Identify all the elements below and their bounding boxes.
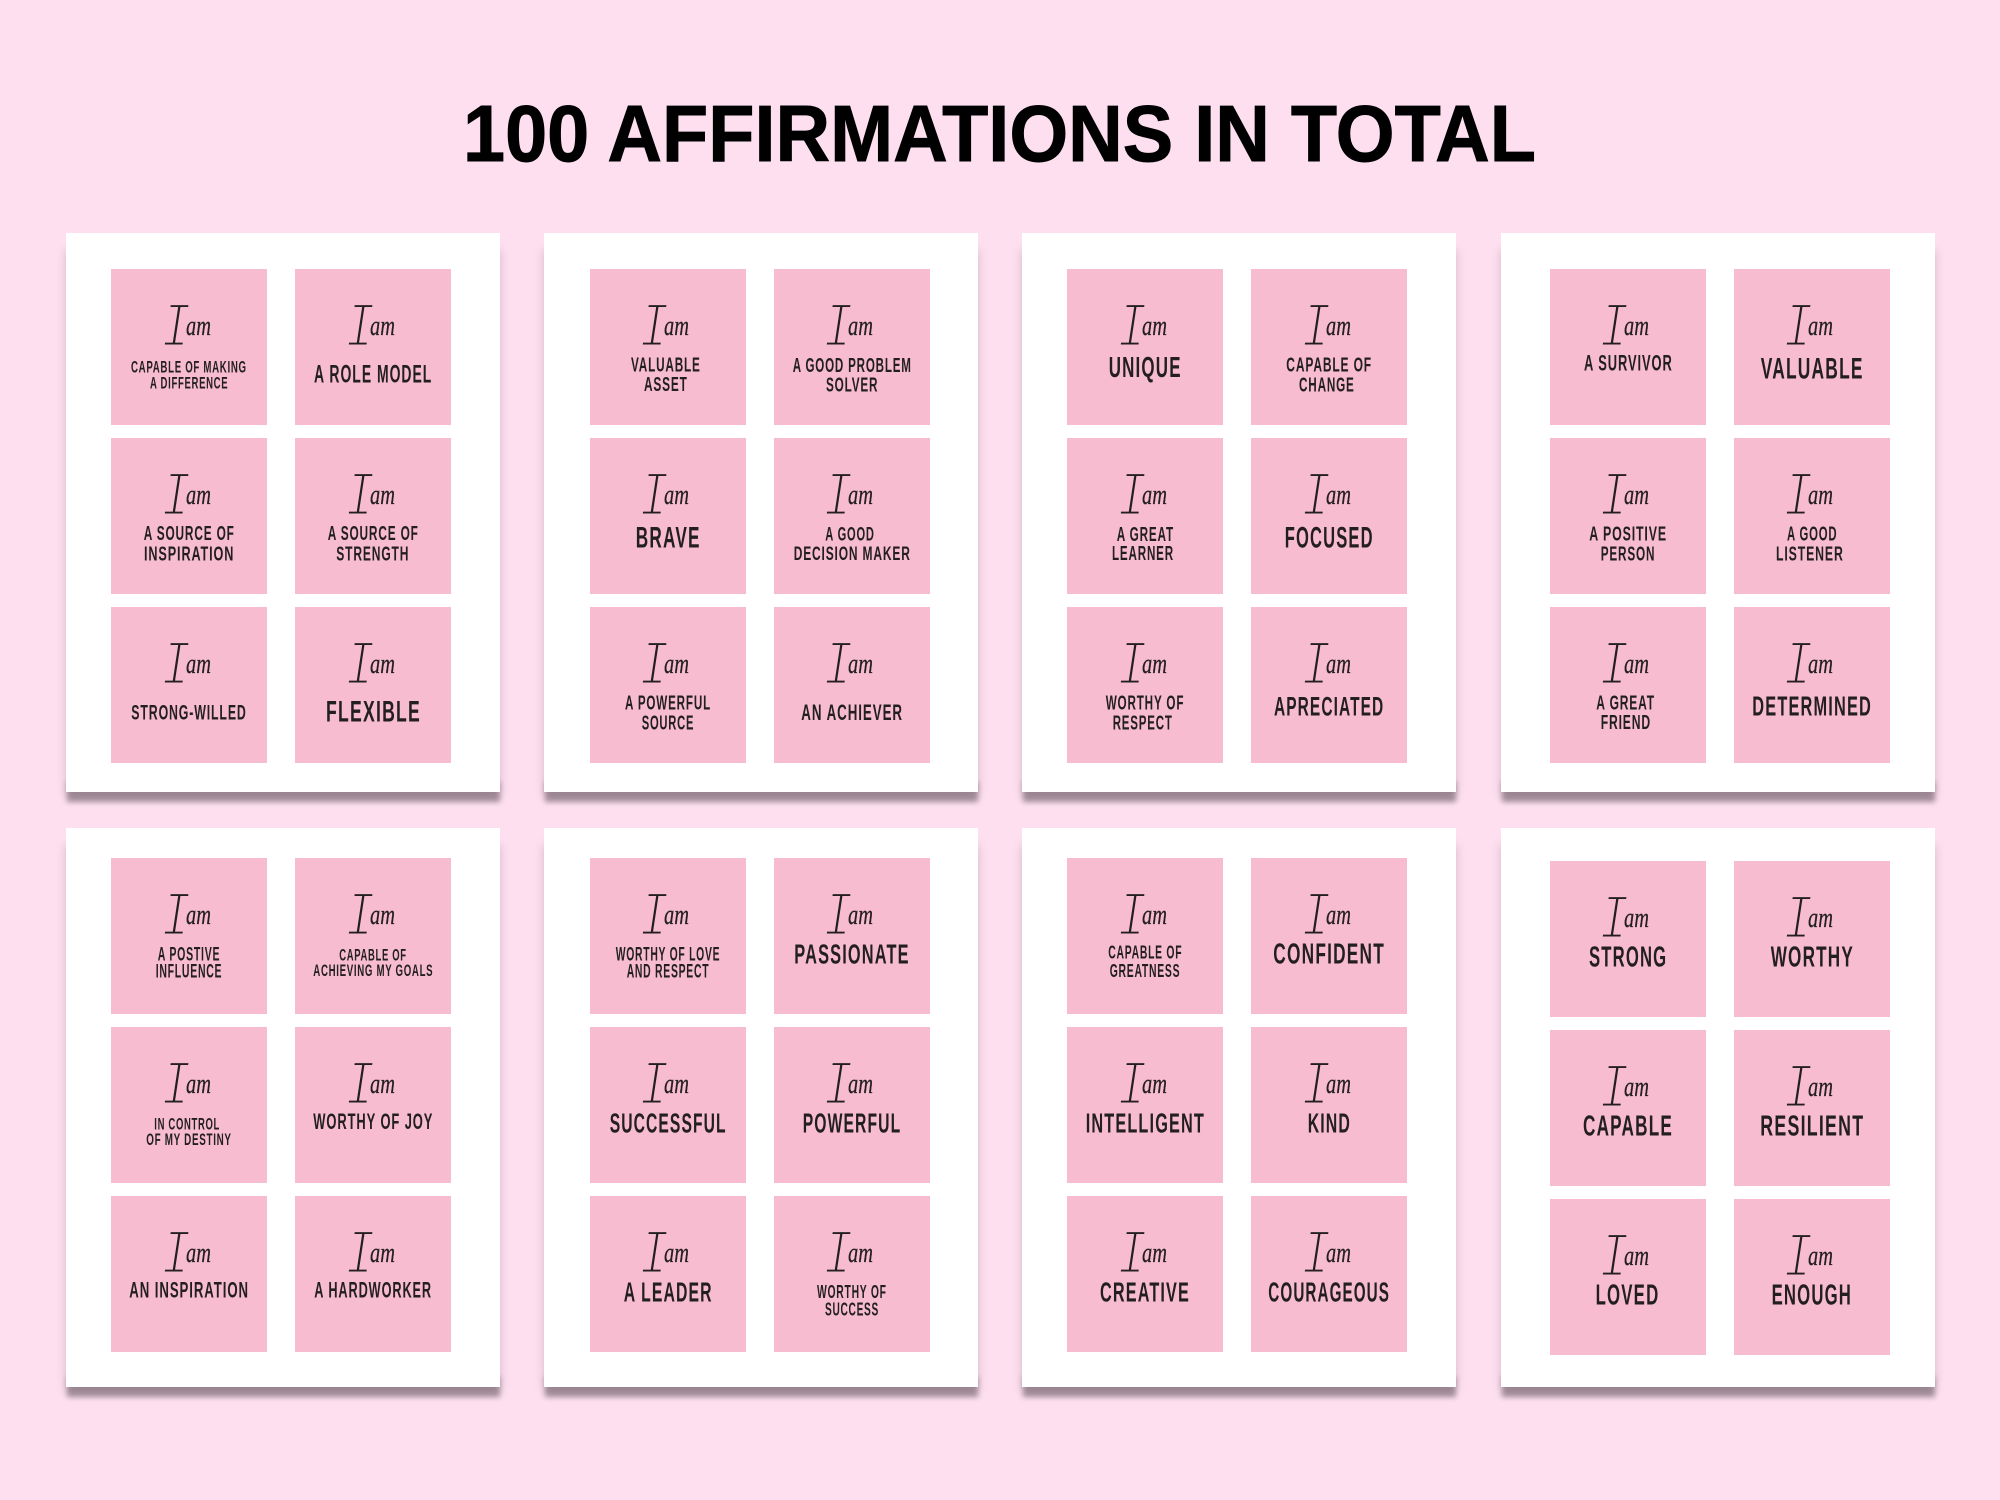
- card: an inspiration: I: [161, 1221, 191, 1293]
- card: strong-willed: [111, 607, 267, 763]
- card: a good problem solver: [774, 269, 930, 425]
- card: a survivor: A SURVIVOR: [1584, 351, 1673, 376]
- card: a great friend: I: [1599, 632, 1629, 704]
- card: powerful: I: [823, 1052, 853, 1124]
- card: a survivor: [1550, 269, 1706, 425]
- card: loved: LOVED: [1596, 1280, 1659, 1312]
- panel: sheet 5: [66, 828, 500, 1397]
- card: capable: I: [1599, 1055, 1629, 1127]
- card: a role model: I: [345, 294, 375, 366]
- card: focused: FOCUSED: [1285, 521, 1374, 554]
- panel: sheet 8: [1501, 828, 1935, 1397]
- card: capable of making a difference: am: [186, 311, 211, 342]
- card: capable of achieving my goals: [295, 858, 451, 1014]
- card: flexible: [295, 607, 451, 763]
- card: enough: ENOUGH: [1772, 1280, 1852, 1312]
- panel: sheet 1: [66, 233, 500, 802]
- card: a source of strength: A SOURCE OF: [328, 522, 419, 545]
- card: resilient: I: [1783, 1055, 1813, 1127]
- card: a powerful source: SOURCE: [642, 712, 694, 734]
- card: a source of inspiration: A SOURCE OF: [144, 522, 235, 545]
- card: a positive person: A POSITIVE: [1589, 522, 1667, 545]
- card: worthy of joy: am: [370, 1069, 395, 1100]
- panel: sheet 4: [1501, 233, 1935, 802]
- card: a great learner: [1067, 438, 1223, 594]
- card: courageous: am: [1326, 1238, 1351, 1269]
- card: capable of achieving my goals: ACHIEVING MY GOALS: [313, 961, 433, 980]
- card: resilient: [1734, 1030, 1890, 1186]
- card: capable of greatness: [1067, 858, 1223, 1014]
- card: determined: I: [1783, 632, 1813, 704]
- card: unique: UNIQUE: [1109, 352, 1182, 384]
- card: a good listener: am: [1808, 480, 1833, 511]
- card: courageous: COURAGEOUS: [1268, 1276, 1390, 1307]
- card: a postive influence: INFLUENCE: [156, 962, 222, 983]
- card: a hardworker: am: [370, 1238, 395, 1269]
- card: valuable asset: I: [639, 294, 669, 366]
- card: worthy of joy: I: [345, 1052, 375, 1124]
- card: a survivor: I: [1599, 294, 1629, 366]
- card: unique: I: [1117, 294, 1147, 366]
- card: valuable asset: ASSET: [644, 374, 688, 396]
- card: a good problem solver: am: [848, 311, 873, 342]
- card: passionate: [774, 858, 930, 1014]
- card: successful: [590, 1027, 746, 1183]
- card: loved: [1550, 1199, 1706, 1355]
- card: a powerful source: [590, 607, 746, 763]
- card: a positive person: PERSON: [1601, 542, 1655, 565]
- panel: sheet 2: [544, 233, 978, 802]
- panel: sheet 7: [1022, 828, 1456, 1397]
- card: valuable asset: [590, 269, 746, 425]
- card: a great friend: am: [1624, 649, 1649, 680]
- card: brave: am: [664, 480, 689, 511]
- card: valuable asset: VALUABLE: [631, 355, 701, 377]
- card: apreciated: APRECIATED: [1274, 692, 1384, 722]
- card: capable of change: am: [1326, 311, 1351, 342]
- card: passionate: I: [823, 883, 853, 955]
- card: unique: am: [1142, 311, 1167, 342]
- card: worthy of love and respect: [590, 858, 746, 1014]
- card: strong: I: [1599, 886, 1629, 958]
- card: a source of strength: [295, 438, 451, 594]
- card: a hardworker: A HARDWORKER: [314, 1278, 432, 1303]
- card: valuable: am: [1808, 311, 1833, 342]
- card: a good problem solver: SOLVER: [826, 374, 878, 396]
- card: passionate: am: [848, 900, 873, 931]
- card: a role model: [295, 269, 451, 425]
- card: enough: I: [1783, 1224, 1813, 1296]
- card: a positive person: I: [1599, 463, 1629, 535]
- card: a good decision maker: DECISION MAKER: [794, 543, 911, 565]
- card: a good decision maker: I: [823, 463, 853, 535]
- card: a leader: am: [664, 1238, 689, 1269]
- card: valuable: VALUABLE: [1761, 352, 1864, 385]
- card: worthy of respect: am: [1142, 649, 1167, 680]
- card: intelligent: INTELLIGENT: [1086, 1107, 1205, 1138]
- card: a source of inspiration: am: [186, 480, 211, 511]
- card: a good listener: LISTENER: [1776, 542, 1844, 565]
- card: worthy of love and respect: WORTHY OF LOVE: [616, 945, 720, 966]
- card: a postive influence: [111, 858, 267, 1014]
- card: worthy: I: [1783, 886, 1813, 958]
- card: capable of making a difference: I: [161, 294, 191, 366]
- card: worthy of success: am: [848, 1238, 873, 1269]
- panel: sheet 3: [1022, 233, 1456, 802]
- card: strong-willed: I: [161, 632, 191, 704]
- card: resilient: am: [1808, 1072, 1833, 1103]
- card: capable: CAPABLE: [1583, 1111, 1673, 1143]
- card: a great friend: FRIEND: [1601, 712, 1651, 734]
- card: a powerful source: I: [639, 632, 669, 704]
- card: worthy: [1734, 861, 1890, 1017]
- card: enough: am: [1808, 1241, 1833, 1272]
- card: confident: am: [1326, 900, 1351, 931]
- card: focused: am: [1326, 480, 1351, 511]
- card: powerful: am: [848, 1069, 873, 1100]
- card: strong: am: [1624, 903, 1649, 934]
- card: confident: CONFIDENT: [1273, 939, 1385, 971]
- card: in control of my destiny: [111, 1027, 267, 1183]
- card: a source of strength: I: [345, 463, 375, 535]
- card: worthy of joy: [295, 1027, 451, 1183]
- card: kind: KIND: [1308, 1107, 1351, 1138]
- card: successful: I: [639, 1052, 669, 1124]
- card: an achiever: I: [823, 632, 853, 704]
- card: focused: I: [1301, 463, 1331, 535]
- card: in control of my destiny: OF MY DESTINY: [146, 1130, 232, 1149]
- card: a good listener: A GOOD: [1787, 522, 1837, 545]
- card: a good listener: [1734, 438, 1890, 594]
- card: worthy of joy: WORTHY OF JOY: [313, 1109, 433, 1134]
- card: flexible: am: [370, 649, 395, 680]
- card: passionate: PASSIONATE: [794, 938, 910, 969]
- card: kind: I: [1301, 1052, 1331, 1124]
- card: capable of making a difference: A DIFFERENCE: [150, 374, 228, 393]
- card: a survivor: am: [1624, 311, 1649, 342]
- card: strong-willed: STRONG-WILLED: [131, 701, 247, 724]
- card: a postive influence: am: [186, 900, 211, 931]
- card: courageous: [1251, 1196, 1407, 1352]
- card: capable of change: [1251, 269, 1407, 425]
- card: brave: I: [639, 463, 669, 535]
- card: focused: [1251, 438, 1407, 594]
- card: a great friend: A GREAT: [1596, 692, 1655, 714]
- card: a role model: A ROLE MODEL: [314, 362, 432, 389]
- card: capable of greatness: GREATNESS: [1110, 961, 1180, 981]
- card: worthy of success: [774, 1196, 930, 1352]
- card: worthy of love and respect: am: [664, 900, 689, 931]
- card: worthy of respect: RESPECT: [1113, 712, 1173, 734]
- card: a powerful source: am: [664, 649, 689, 680]
- card: capable of achieving my goals: I: [345, 883, 375, 955]
- card: a hardworker: I: [345, 1221, 375, 1293]
- card: worthy: WORTHY: [1771, 942, 1854, 974]
- card: confident: [1251, 858, 1407, 1014]
- card: a leader: I: [639, 1221, 669, 1293]
- card: capable: am: [1624, 1072, 1649, 1103]
- card: flexible: I: [345, 632, 375, 704]
- card: intelligent: am: [1142, 1069, 1167, 1100]
- card: a role model: am: [370, 311, 395, 342]
- card: capable of making a difference: [111, 269, 267, 425]
- panel: sheet 6: [544, 828, 978, 1397]
- card: strong-willed: am: [186, 649, 211, 680]
- card: apreciated: [1251, 607, 1407, 763]
- card: an inspiration: am: [186, 1238, 211, 1269]
- card: a good listener: I: [1783, 463, 1813, 535]
- card: powerful: POWERFUL: [803, 1107, 901, 1138]
- card: determined: DETERMINED: [1752, 691, 1872, 722]
- card: a leader: A LEADER: [624, 1276, 713, 1307]
- card: creative: I: [1117, 1221, 1147, 1293]
- card: a hardworker: [295, 1196, 451, 1352]
- card: a positive person: am: [1624, 480, 1649, 511]
- card: strong: [1550, 861, 1706, 1017]
- card: worthy of success: I: [823, 1221, 853, 1293]
- card: capable of making a difference: CAPABLE OF MAKING: [131, 358, 247, 377]
- card: flexible: FLEXIBLE: [326, 696, 421, 729]
- card: resilient: RESILIENT: [1760, 1111, 1864, 1143]
- card: enough: [1734, 1199, 1890, 1355]
- card: a great friend: [1550, 607, 1706, 763]
- card: in control of my destiny: IN CONTROL: [154, 1114, 220, 1133]
- card: determined: [1734, 607, 1890, 763]
- card: worthy of success: SUCCESS: [825, 1299, 879, 1319]
- card: a postive influence: A POSTIVE: [158, 945, 220, 966]
- card: brave: BRAVE: [636, 521, 701, 554]
- card: valuable asset: am: [664, 311, 689, 342]
- card: valuable: I: [1783, 294, 1813, 366]
- card: successful: SUCCESSFUL: [610, 1107, 727, 1138]
- card: a great learner: I: [1117, 463, 1147, 535]
- card: a source of inspiration: [111, 438, 267, 594]
- card: a good decision maker: [774, 438, 930, 594]
- card: capable of change: CAPABLE OF: [1286, 354, 1372, 376]
- card: capable of greatness: CAPABLE OF: [1108, 943, 1182, 963]
- card: worthy of love and respect: I: [639, 883, 669, 955]
- card: a source of inspiration: INSPIRATION: [144, 542, 234, 565]
- card: a positive person: [1550, 438, 1706, 594]
- card: loved: am: [1624, 1241, 1649, 1272]
- card: worthy of love and respect: AND RESPECT: [627, 962, 709, 983]
- card: brave: [590, 438, 746, 594]
- card: worthy of respect: WORTHY OF: [1106, 693, 1184, 715]
- card: a great learner: am: [1142, 480, 1167, 511]
- card: courageous: I: [1301, 1221, 1331, 1293]
- card: a source of inspiration: I: [161, 463, 191, 535]
- card: creative: am: [1142, 1238, 1167, 1269]
- card: worthy: am: [1808, 903, 1833, 934]
- card: valuable: [1734, 269, 1890, 425]
- card: capable of change: I: [1301, 294, 1331, 366]
- card: strong: STRONG: [1589, 942, 1667, 974]
- card: capable of achieving my goals: CAPABLE OF: [339, 946, 407, 965]
- card: confident: I: [1301, 883, 1331, 955]
- title: 100 AFFIRMATIONS IN TOTAL: [463, 89, 1536, 178]
- card: a good decision maker: am: [848, 480, 873, 511]
- card: in control of my destiny: I: [161, 1052, 191, 1124]
- card: an achiever: AN ACHIEVER: [801, 700, 903, 725]
- card: worthy of success: WORTHY OF: [817, 1282, 887, 1302]
- card: powerful: [774, 1027, 930, 1183]
- card: intelligent: [1067, 1027, 1223, 1183]
- card: capable of greatness: I: [1117, 883, 1147, 955]
- card: apreciated: am: [1326, 649, 1351, 680]
- card: a source of strength: am: [370, 480, 395, 511]
- card: a great learner: LEARNER: [1112, 543, 1174, 565]
- card: loved: I: [1599, 1224, 1629, 1296]
- card: capable of change: CHANGE: [1299, 374, 1355, 396]
- card: a postive influence: I: [161, 883, 191, 955]
- card: unique: [1067, 269, 1223, 425]
- card: capable of greatness: am: [1142, 900, 1167, 931]
- card: intelligent: I: [1117, 1052, 1147, 1124]
- card: creative: [1067, 1196, 1223, 1352]
- card: a good decision maker: A GOOD: [825, 524, 875, 546]
- card: kind: am: [1326, 1069, 1351, 1100]
- card: kind: [1251, 1027, 1407, 1183]
- card: capable: [1550, 1030, 1706, 1186]
- card: an inspiration: [111, 1196, 267, 1352]
- card: a good problem solver: A GOOD PROBLEM: [793, 355, 912, 377]
- card: a good problem solver: I: [823, 294, 853, 366]
- card: capable of achieving my goals: am: [370, 900, 395, 931]
- card: an achiever: am: [848, 649, 873, 680]
- card: creative: CREATIVE: [1100, 1276, 1190, 1307]
- card: worthy of respect: [1067, 607, 1223, 763]
- card: an achiever: [774, 607, 930, 763]
- card: apreciated: I: [1301, 632, 1331, 704]
- card: a leader: [590, 1196, 746, 1352]
- card: determined: am: [1808, 649, 1833, 680]
- card: successful: am: [664, 1069, 689, 1100]
- card: in control of my destiny: am: [186, 1069, 211, 1100]
- card: worthy of respect: I: [1117, 632, 1147, 704]
- card: an inspiration: AN INSPIRATION: [129, 1278, 249, 1303]
- card: a great learner: A GREAT: [1117, 524, 1174, 546]
- card: a powerful source: A POWERFUL: [625, 693, 711, 715]
- card: a source of strength: STRENGTH: [336, 542, 409, 565]
